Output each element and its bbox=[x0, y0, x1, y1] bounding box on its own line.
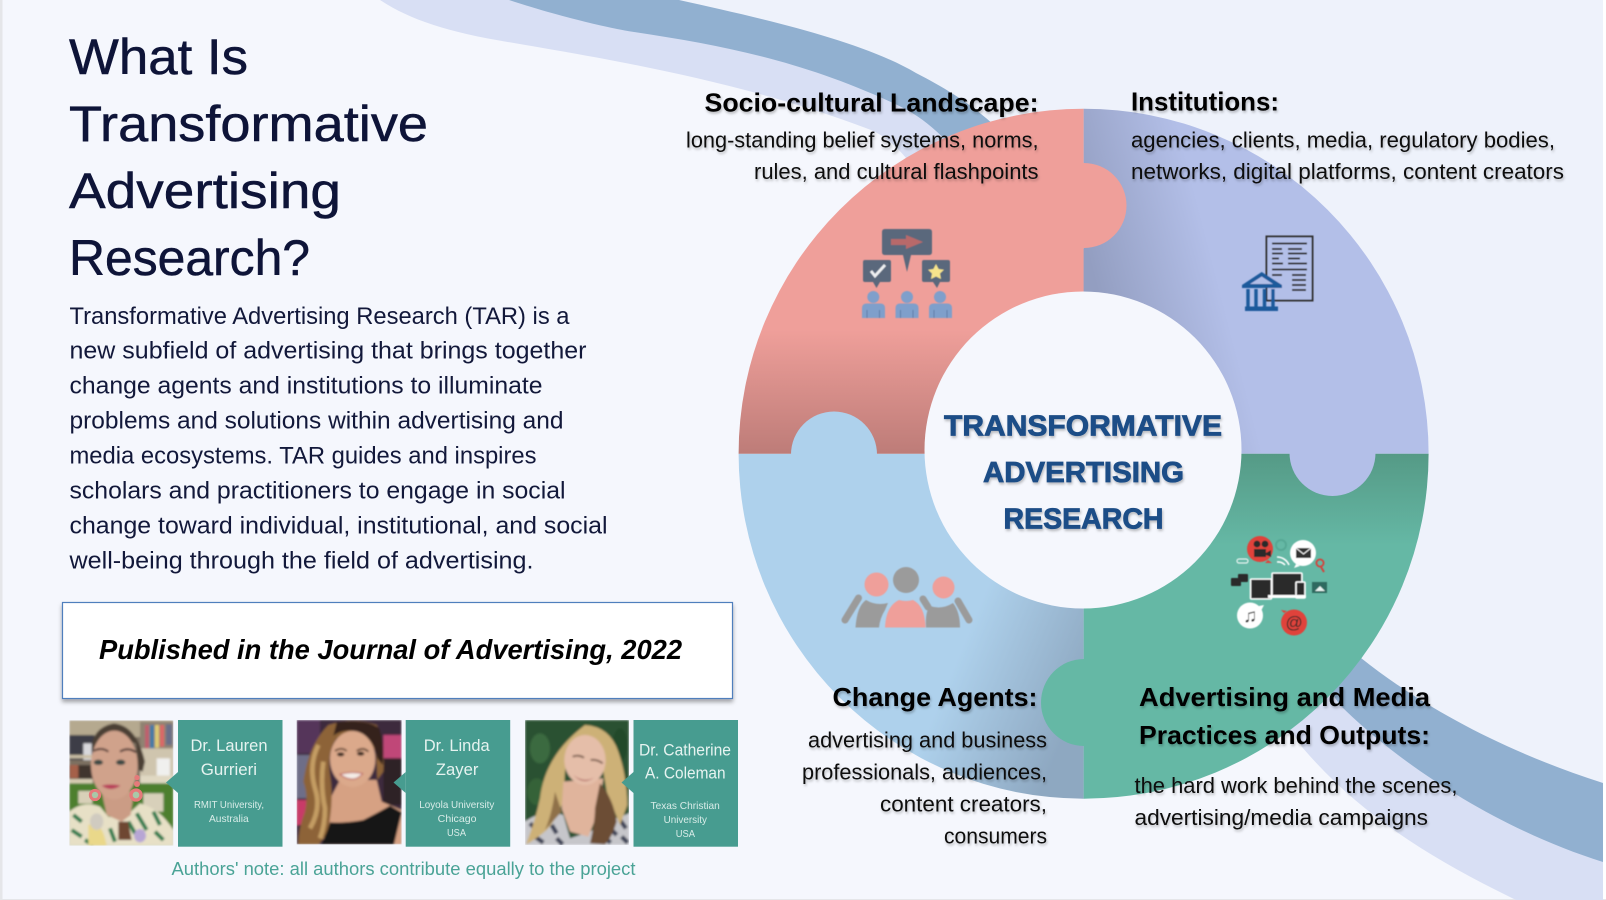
photo: Catherine Coleman bbox=[525, 720, 629, 845]
label: socio-cultural landscape bbox=[686, 88, 1038, 184]
author card: Lauren Gurrieri bbox=[69, 720, 282, 847]
name plate: Lauren Gurrieri bbox=[166, 720, 282, 847]
puzzle piece: socio-cultural landscape bbox=[739, 109, 1084, 454]
centre label: TRANSFORMATIVE bbox=[944, 410, 1222, 442]
callout: journal publication: Published in the Journal of Advertising, 2022 bbox=[99, 634, 682, 665]
tab: periwinkle bbox=[1290, 453, 1376, 496]
label: advertising and media practices: Practices and Outputs: bbox=[1139, 720, 1430, 750]
intro paragraph: change agents and institutions to illuminate bbox=[70, 372, 542, 400]
title bbox=[69, 29, 428, 286]
intro paragraph: change toward individual, institutional, and social bbox=[70, 512, 608, 540]
centre label bbox=[944, 410, 1222, 536]
name plate: Lauren Gurrieri: Australia bbox=[209, 813, 249, 825]
name plate: Catherine Coleman: USA bbox=[676, 828, 695, 840]
centre label: ADVERTISING bbox=[983, 457, 1184, 489]
name plate: Lauren Gurrieri: RMIT University, bbox=[194, 799, 264, 811]
title: Advertising bbox=[69, 163, 341, 219]
label: socio-cultural landscape: long-standing belief systems, norms, bbox=[686, 128, 1038, 152]
icon: media and devices bbox=[1231, 536, 1327, 636]
name plate: Linda Zayer: Loyola University bbox=[419, 799, 495, 811]
icon: media and devices: @ bbox=[1286, 613, 1303, 632]
puzzle piece: institutions bbox=[1084, 109, 1429, 454]
icon: group of people bbox=[845, 567, 969, 628]
intro paragraph: scholars and practitioners to engage in social bbox=[70, 478, 566, 504]
name plate: Linda Zayer: Dr. Linda bbox=[424, 736, 490, 755]
label: change agents bbox=[802, 682, 1047, 848]
ribbons: background swoosh bbox=[380, 0, 1603, 900]
label: institutions bbox=[1131, 86, 1564, 184]
icon: speech bubbles and people bbox=[862, 229, 952, 318]
label: change agents: consumers bbox=[944, 824, 1047, 848]
label: institutions: agencies, clients, media, regulatory bodies, bbox=[1131, 128, 1555, 152]
label: institutions: networks, digital platforms, content creators bbox=[1131, 159, 1564, 184]
earrings bbox=[90, 775, 141, 800]
label: socio-cultural landscape: rules, and cultural flashpoints bbox=[754, 159, 1038, 184]
name plate: Lauren Gurrieri: Dr. Lauren bbox=[190, 736, 268, 755]
intro paragraph: Transformative Advertising Research (TAR) is a bbox=[70, 303, 570, 330]
callout: journal publication bbox=[62, 602, 732, 698]
name plate: Linda Zayer: Zayer bbox=[436, 760, 479, 779]
icon: document and institution bbox=[1242, 236, 1312, 311]
name plate: Linda Zayer: USA bbox=[447, 827, 466, 839]
name plate: Lauren Gurrieri: Gurrieri bbox=[201, 760, 257, 779]
label: advertising and media practices: the hard work behind the scenes, bbox=[1134, 773, 1458, 798]
centre label: RESEARCH bbox=[1004, 504, 1164, 536]
name plate: Catherine Coleman: A. Coleman bbox=[645, 764, 726, 782]
label: change agents: Change Agents: bbox=[832, 682, 1038, 712]
intro paragraph: problems and solutions within advertising and bbox=[70, 408, 564, 434]
label: change agents: advertising and business bbox=[808, 728, 1047, 752]
intro paragraph: new subfield of advertising that brings together bbox=[70, 338, 586, 364]
name plate: Catherine Coleman: University bbox=[664, 814, 708, 826]
puzzle piece: change agents bbox=[739, 454, 1084, 799]
authors note: Authors' note: all authors contribute equally to the project bbox=[172, 859, 636, 879]
label: change agents: professionals, audiences, bbox=[802, 760, 1047, 784]
label: advertising and media practices bbox=[1134, 682, 1458, 830]
tab: pink bbox=[1083, 163, 1126, 248]
title: What Is bbox=[69, 29, 248, 85]
label: institutions: Institutions: bbox=[1131, 86, 1279, 116]
puzzle piece: advertising and media practices bbox=[1084, 454, 1429, 799]
tab: green bbox=[1041, 659, 1084, 746]
intro paragraph bbox=[68, 303, 607, 574]
label: advertising and media practices: advertising/media campaigns bbox=[1134, 805, 1428, 830]
photo: Lauren Gurrieri bbox=[69, 720, 173, 846]
name plate: Catherine Coleman: Texas Christian bbox=[650, 800, 720, 812]
name plate: Catherine Coleman bbox=[622, 720, 738, 847]
centre circle bbox=[924, 292, 1242, 608]
icon: media and devices: ♫ bbox=[1243, 606, 1257, 627]
photo: Linda Zayer bbox=[297, 720, 402, 844]
title: Transformative bbox=[69, 96, 428, 152]
label: socio-cultural landscape: Socio-cultural Landscape: bbox=[704, 88, 1038, 118]
tab: light blue bbox=[791, 411, 877, 454]
name plate: Linda Zayer bbox=[394, 720, 510, 847]
intro paragraph: media ecosystems. TAR guides and inspires bbox=[70, 442, 536, 470]
intro paragraph: well-being through the field of advertising. bbox=[68, 548, 533, 574]
label: advertising and media practices: Advertising and Media bbox=[1139, 682, 1431, 712]
label: change agents: content creators, bbox=[880, 792, 1047, 816]
name plate: Linda Zayer: Chicago bbox=[438, 813, 477, 825]
author card: Catherine A. Coleman bbox=[525, 720, 738, 847]
title: Research? bbox=[69, 230, 310, 286]
author card: Linda Zayer bbox=[297, 720, 510, 847]
name plate: Catherine Coleman: Dr. Catherine bbox=[639, 740, 731, 760]
puzzle ring diagram bbox=[739, 109, 1429, 799]
